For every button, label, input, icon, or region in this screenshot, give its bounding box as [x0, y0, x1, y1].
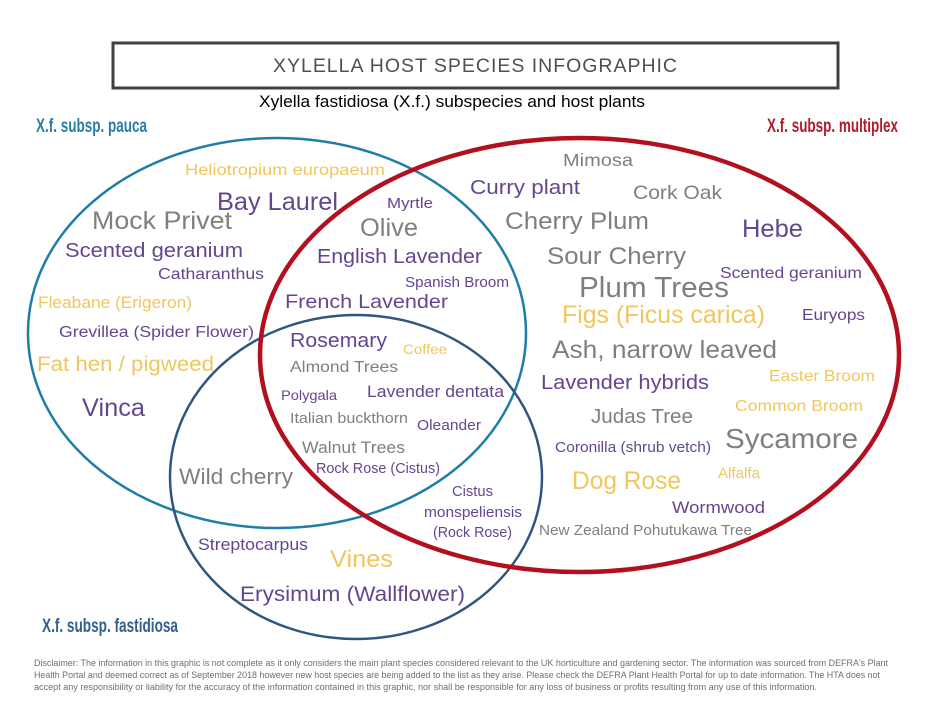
plant: Coffee: Coffee: [403, 342, 447, 357]
panel: pauca only plants: [37, 162, 385, 422]
plant: Mock Privet: Mock Privet: [92, 207, 232, 235]
panel: multiplex only plants: [470, 150, 875, 539]
plant: Common Broom: Common Broom: [735, 398, 863, 415]
plant: Euryops: Euryops: [802, 307, 865, 324]
plant: Cistus monspeliensis (Rock Rose): Cistus: [452, 484, 493, 500]
heading: X.f. subsp. fastidiosa: X.f. subsp. fastidiosa: [42, 616, 178, 637]
plant: Fleabane: Fleabane (Erigeron): [38, 294, 192, 312]
panel: fastidiosa only plants: [198, 536, 465, 606]
plant: Lavender dentata: Lavender dentata: [367, 383, 505, 401]
plant: Cistus monspeliensis (Rock Rose): [424, 484, 522, 541]
plant: Alfalfa: Alfalfa: [718, 466, 761, 482]
subtitle: Xylella fastidiosa (X.f.) subspecies and host plants: [259, 92, 645, 111]
disclaimer text block: Disclaimer: The information in this graphic is not complete as it only considers the main plant species considered relevant to the UK horticulture and gardening sector. The information was sourced from DEFRA's Plant: [34, 658, 888, 668]
plant: Sycamore: Sycamore: [725, 423, 858, 454]
plant: Polygala: Polygala: [281, 387, 337, 403]
plant: Scented geranium: Scented geranium: [65, 240, 243, 262]
plant: Wormwood: Wormwood: [672, 499, 765, 517]
disclaimer text block: [34, 658, 888, 692]
plant: Ash, narrow leaved: Ash, narrow leaved: [552, 336, 777, 364]
plant: Judas Tree: Judas Tree: [591, 406, 693, 428]
plant: Vinca: Vinca: [82, 394, 145, 422]
venn circle: pauca: [28, 138, 526, 528]
venn circle: fastidiosa: [170, 315, 542, 639]
plant: Erysimum (Wallflower): Erysimum (Wallflower): [240, 583, 465, 606]
plant: Coronilla (shrub vetch): Coronilla (shrub vetch): [555, 439, 711, 456]
plant: Plum Trees: Plum Trees: [579, 272, 729, 304]
venn circle: multiplex: [260, 138, 899, 572]
plant: Cork Oak: Cork Oak: [633, 182, 722, 204]
heading: X.f. subsp. pauca: X.f. subsp. pauca: [36, 116, 147, 137]
plant: Catharanthus: Catharanthus: [158, 266, 264, 283]
panel: pauca and multiplex overlap: [285, 196, 509, 313]
plant: Cistus monspeliensis (Rock Rose): monspeliensis: [424, 505, 522, 521]
plant: Mimosa: Mimosa: [563, 150, 633, 170]
title box: XYLELLA HOST SPECIES INFOGRAPHIC: [273, 55, 677, 77]
plant: Streptocarpus: Streptocarpus: [198, 536, 308, 554]
plant: Spanish Broom: Spanish Broom: [405, 275, 509, 291]
plant: Rosemary: Rosemary: [290, 329, 388, 352]
plant: Cherry Plum: Cherry Plum: [505, 208, 649, 235]
plant: Fat hen / pigweed: Fat hen / pigweed: [37, 353, 214, 376]
plant: Olive: Olive: [360, 214, 418, 242]
plant: Dog Rose: Dog Rose: [572, 467, 681, 495]
plant: Italian buckthorn: Italian buckthorn: [290, 410, 408, 427]
plant: English Lavender: English Lavender: [317, 246, 482, 268]
plant: Wild cherry: Wild cherry: [179, 464, 293, 489]
plant: Heliotropium europaeum: Heliotropium europaeum: [185, 162, 385, 179]
plant: Sour Cherry: Sour Cherry: [547, 243, 687, 270]
plant: Cistus monspeliensis (Rock Rose): (Rock Rose): [433, 525, 512, 541]
plant: Almond Trees: Almond Trees: [290, 359, 398, 376]
plant: Vines: Vines: [330, 546, 393, 573]
panel: all three overlap: [281, 329, 505, 477]
disclaimer text block: Health Portal and deemed correct as of September 2018 however new host species are being added to the list as they arise. Please check the DEFRA Plant Health Portal for up to date information. The HTA does not: [34, 670, 880, 680]
title box: [113, 43, 838, 88]
plant: Curry plant: Curry plant: [470, 176, 580, 199]
plant: French Lavender: French Lavender: [285, 291, 449, 313]
plant: Lavender hybrids: Lavender hybrids: [541, 371, 709, 394]
disclaimer text block: accept any responsibility or liability for the accuracy of the information contained in this graphic, nor shall be responsible for any loss of business or profits resulting from any use of this information.: [34, 682, 817, 692]
plant: Hebe: Hebe: [742, 215, 803, 243]
plant: Scented geranium: Scented geranium: [720, 265, 862, 282]
plant: Walnut Trees: Walnut Trees: [302, 439, 405, 457]
plant: Easter Broom: Easter Broom: [769, 368, 875, 385]
plant: Rock Rose (Cistus): Rock Rose (Cistus): [316, 461, 440, 477]
plant: Figs (Ficus carica): Figs (Ficus carica): [562, 301, 765, 329]
plant: Grevillea: Grevillea (Spider Flower): [59, 324, 254, 341]
plant: Oleander: Oleander: [417, 418, 481, 434]
plant: Bay Laurel: Bay Laurel: [217, 188, 338, 216]
plant: New Zealand Pohutukawa Tree: New Zealand Pohutukawa Tree: [539, 523, 752, 539]
plant: Myrtle: Myrtle: [387, 196, 433, 212]
